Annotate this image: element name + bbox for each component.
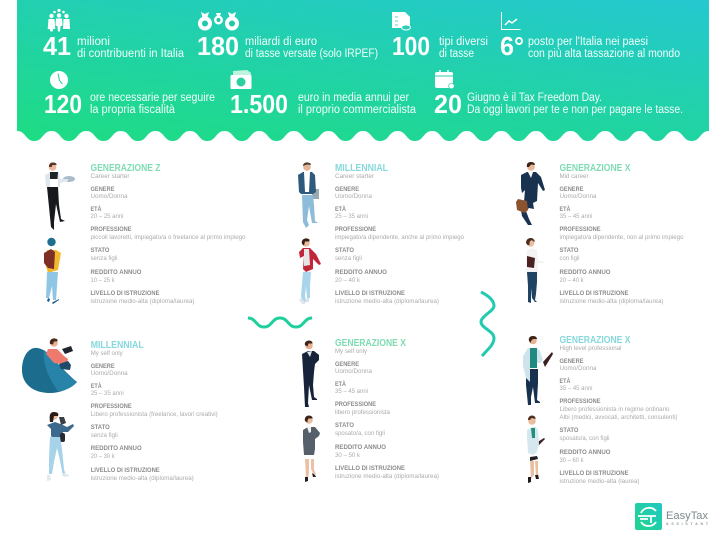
text block: profile details: STATO — [335, 422, 354, 429]
text block: profile details: istruzione medio-alta (laurea) — [560, 478, 640, 485]
text block: profile details: 20 – 25 anni — [90, 213, 124, 220]
text block: profile details: Libero professionista (freelance, lavori creativi) — [91, 411, 218, 418]
figure: businesswoman — [526, 238, 544, 303]
stat: 1.500 euro: euro in media annui per — [298, 92, 409, 104]
stat: 180 miliardi: miliardi di euro — [245, 36, 317, 48]
text block: profile details: Mid career — [560, 173, 589, 180]
text block: profile details: con figli — [560, 255, 580, 262]
text block: profile details: 30 – 50 k — [335, 452, 361, 459]
text block: profile details: GENERE — [560, 186, 584, 193]
stat: 180 miliardi — [197, 31, 378, 61]
text block: profile details: senza figli — [335, 255, 362, 262]
text block: profile details — [90, 173, 246, 305]
text block: profile details: LIVELLO DI ISTRUZIONE — [91, 467, 160, 474]
stat: 41 milioni: di contribuenti in Italia — [77, 48, 185, 60]
icon: tax document — [392, 12, 410, 30]
text block: profile details: PROFESSIONE — [560, 398, 601, 405]
logo mark — [635, 503, 662, 530]
banner background with wavy edge — [17, 0, 709, 141]
text block: profile details: PROFESSIONE — [91, 403, 132, 410]
text block: profile details: ETÀ — [560, 376, 571, 385]
stat: 20 Giugno: 20 — [434, 89, 462, 119]
figure: male doctor with clipboard — [523, 336, 553, 405]
heading: Generazione X: GENERAZIONE X — [560, 335, 631, 346]
text block: profile details: sposato/a, con figli — [560, 435, 610, 442]
text block: profile details: 30 – 60 k — [560, 457, 584, 464]
logo tagline: ASSISTANT — [666, 522, 709, 526]
text block: profile details: REDDITO ANNUO — [560, 449, 610, 456]
text block: profile details: REDDITO ANNUO — [560, 269, 610, 276]
icon: money bags — [198, 12, 239, 30]
text block: profile details: My self only — [91, 350, 123, 357]
text block: profile details: senza figli — [91, 432, 118, 439]
text block: profile details — [560, 173, 684, 305]
figure: woman in red jacket — [299, 238, 321, 304]
stat: 100 tipi di tasse — [392, 31, 488, 61]
stat: 20 Giugno — [434, 89, 683, 119]
text block: profile details: STATO — [335, 247, 354, 254]
stat: 6° posto: 6° — [500, 31, 524, 61]
text block: profile details: piccoli lavoretti, impiegato/a o freelance al primo impiego — [90, 234, 246, 241]
text block: profile details: GENERE — [335, 361, 359, 368]
stat: 1.500 euro: il proprio commercialista — [298, 104, 417, 116]
text block: profile details: GENERE — [560, 358, 584, 365]
stat: 6° posto: con più alta tassazione al mondo — [528, 48, 680, 60]
text block: profile details: 20 – 40 k — [335, 277, 361, 284]
text block: profile details — [335, 173, 464, 305]
heading: Generazione X: GENERAZIONE X — [560, 163, 631, 174]
figure: man reading on bean bag — [22, 338, 77, 393]
text block: profile details: impiegato/a dipendente, non al primo impiego — [560, 234, 684, 241]
wave connector: horizontal — [248, 318, 312, 327]
stat: 100 tipi di tasse: di tasse — [439, 48, 474, 60]
stat: 1.500 euro — [230, 89, 417, 119]
stat: 100 tipi di tasse: 100 — [392, 31, 430, 61]
text block: profile details: GENERE — [335, 186, 359, 193]
text block: profile details: impiegato/a dipendente, anche al primo impiego — [335, 234, 464, 241]
text block: profile details: GENERE — [90, 186, 115, 193]
stat: 41 milioni — [43, 31, 185, 61]
text block: profile details: LIVELLO DI ISTRUZIONE — [560, 470, 629, 477]
text block: profile details: STATO — [560, 427, 578, 434]
figure: woman with camera — [47, 412, 74, 481]
figure: businessman with briefcase — [516, 162, 545, 225]
text block: profile details: PROFESSIONE — [335, 401, 376, 408]
text block: profile details: Career starter — [335, 173, 375, 180]
panel: Generazione X mid career — [516, 162, 684, 305]
wave connector: vertical — [481, 292, 494, 356]
text block: profile details: istruzione medio-alta (diploma/laurea) — [90, 298, 194, 305]
text block: profile details: Uomo/Donna — [91, 370, 128, 377]
text block: profile details: LIVELLO DI ISTRUZIONE — [560, 290, 629, 297]
panel: Generazione X high level professional — [523, 335, 678, 485]
figure: female doctor — [527, 416, 545, 483]
text block: profile details: 25 – 35 anni — [335, 213, 368, 220]
heading: Generazione X: GENERAZIONE X — [335, 338, 406, 349]
text block: profile details: libero professionista — [335, 409, 390, 416]
stat: 100 tipi di tasse: tipi diversi — [439, 36, 488, 48]
text block: profile details — [560, 345, 678, 485]
text block: profile details: STATO — [560, 247, 578, 254]
text block: profile details: LIVELLO DI ISTRUZIONE — [335, 465, 405, 472]
text block: profile details: Career starter — [90, 173, 130, 180]
text block: profile details: sposato/a, con figli — [335, 430, 385, 437]
stat: 120 ore: 120 — [44, 89, 82, 119]
text block: profile details: ETÀ — [90, 204, 102, 213]
text block: profile details: Uomo/Donna — [560, 193, 597, 200]
text block: profile details: 10 – 25 k — [90, 277, 115, 284]
text block: profile details: REDDITO ANNUO — [90, 269, 142, 276]
stat: 120 ore — [44, 89, 215, 119]
text block: profile details: STATO — [91, 424, 110, 431]
heading: Generazione Z: GENERAZIONE Z — [90, 163, 160, 174]
figure: waiter — [45, 162, 75, 230]
text block: profile details: Uomo/Donna — [90, 193, 128, 200]
text block: profile details: Uomo/Donna — [335, 368, 372, 375]
stat: 41 milioni: 41 — [43, 31, 71, 61]
icon: people — [48, 9, 70, 32]
icon: clock — [50, 71, 68, 89]
stat: 6° posto — [500, 31, 680, 61]
text block: profile details: 20 – 30 k — [91, 453, 115, 460]
text block: profile details: 35 – 45 anni — [335, 388, 368, 395]
text block: profile details: LIVELLO DI ISTRUZIONE — [335, 290, 405, 297]
icon: rising line chart — [502, 12, 520, 30]
text block: profile details: PROFESSIONE — [335, 226, 376, 233]
text block: profile details: PROFESSIONE — [560, 226, 601, 233]
figure: man with laptop — [298, 162, 319, 228]
text block: profile details: ETÀ — [91, 381, 102, 390]
banner: key tax figures — [17, 0, 709, 141]
text block: profile details: REDDITO ANNUO — [91, 445, 142, 452]
text block: profile details: 20 – 40 k — [560, 277, 584, 284]
stat: 180 miliardi: 180 — [197, 31, 239, 61]
stat: 6° posto: posto per l'Italia nei paesi — [528, 36, 648, 48]
logo wordmark: EasyTax — [666, 510, 708, 522]
stat: 120 ore: la propria fiscalità — [90, 104, 176, 116]
panel: Generazione Z career starter — [44, 162, 246, 305]
panel: Millennial career starter — [298, 162, 464, 305]
text block: profile details: Libero professionista in regime ordinario — [560, 406, 670, 413]
text block: profile details: STATO — [90, 247, 110, 254]
figure: man in dark suit arms crossed — [302, 340, 319, 407]
text block: profile details: istruzione medio-alta (diploma/laurea) — [335, 298, 439, 305]
icon: banknotes — [230, 70, 252, 89]
text block: profile details: 25 – 35 anni — [91, 390, 124, 397]
text block: profile details: REDDITO ANNUO — [335, 444, 386, 451]
text block: profile details: 35 – 45 anni — [560, 385, 592, 392]
heading: Millennial: MILLENNIAL — [335, 163, 388, 174]
text block: profile details: ETÀ — [335, 204, 346, 213]
stat: 120 ore: ore necessarie per seguire — [90, 92, 215, 104]
panel: Millennial my self only — [22, 338, 218, 482]
text block: profile details: GENERE — [91, 363, 115, 370]
text block: profile details: 35 – 45 anni — [560, 213, 592, 220]
icon: calendar — [435, 70, 454, 89]
stat: 41 milioni: milioni — [77, 36, 110, 48]
text block: profile details: My self only — [335, 348, 368, 355]
text block: profile details: istruzione medio-alta (diploma/laurea) — [91, 475, 194, 482]
figure: woman in grey suit — [303, 416, 320, 482]
text block: profile details: PROFESSIONE — [90, 226, 132, 233]
text block: profile details: Uomo/Donna — [335, 193, 372, 200]
stat: 1.500 euro: 1.500 — [230, 89, 288, 119]
panel: Generazione X my self only — [302, 338, 439, 482]
heading: Millennial: MILLENNIAL — [91, 340, 144, 351]
text block: profile details: ETÀ — [335, 379, 346, 388]
text block: profile details: Uomo/Donna — [560, 365, 597, 372]
text block: profile details: High level professional — [560, 345, 622, 352]
text block: profile details — [335, 348, 439, 480]
text block: profile details: Albi (medici, avvocati, architetti, consulenti) — [560, 414, 678, 421]
text block: profile details: istruzione medio-alta (diploma/laurea) — [335, 473, 439, 480]
stat: 20 Giugno: Da oggi lavori per te e non per pagare le tasse. — [467, 104, 683, 116]
stat: 180 miliardi: di tasse versate (solo IRPEF) — [245, 48, 378, 60]
figure: young person with backpack — [44, 238, 61, 304]
text block: profile details: REDDITO ANNUO — [335, 269, 387, 276]
text block: profile details — [91, 350, 218, 482]
text block: profile details: istruzione medio-alta (diploma/laurea) — [560, 298, 664, 305]
stat: 20 Giugno: Giugno è il Tax Freedom Day. — [467, 92, 602, 104]
logo: EasyTax Assistant — [635, 503, 709, 530]
text block: profile details: ETÀ — [560, 204, 571, 213]
text block: profile details: LIVELLO DI ISTRUZIONE — [90, 290, 160, 297]
text block: profile details: senza figli — [90, 255, 118, 262]
